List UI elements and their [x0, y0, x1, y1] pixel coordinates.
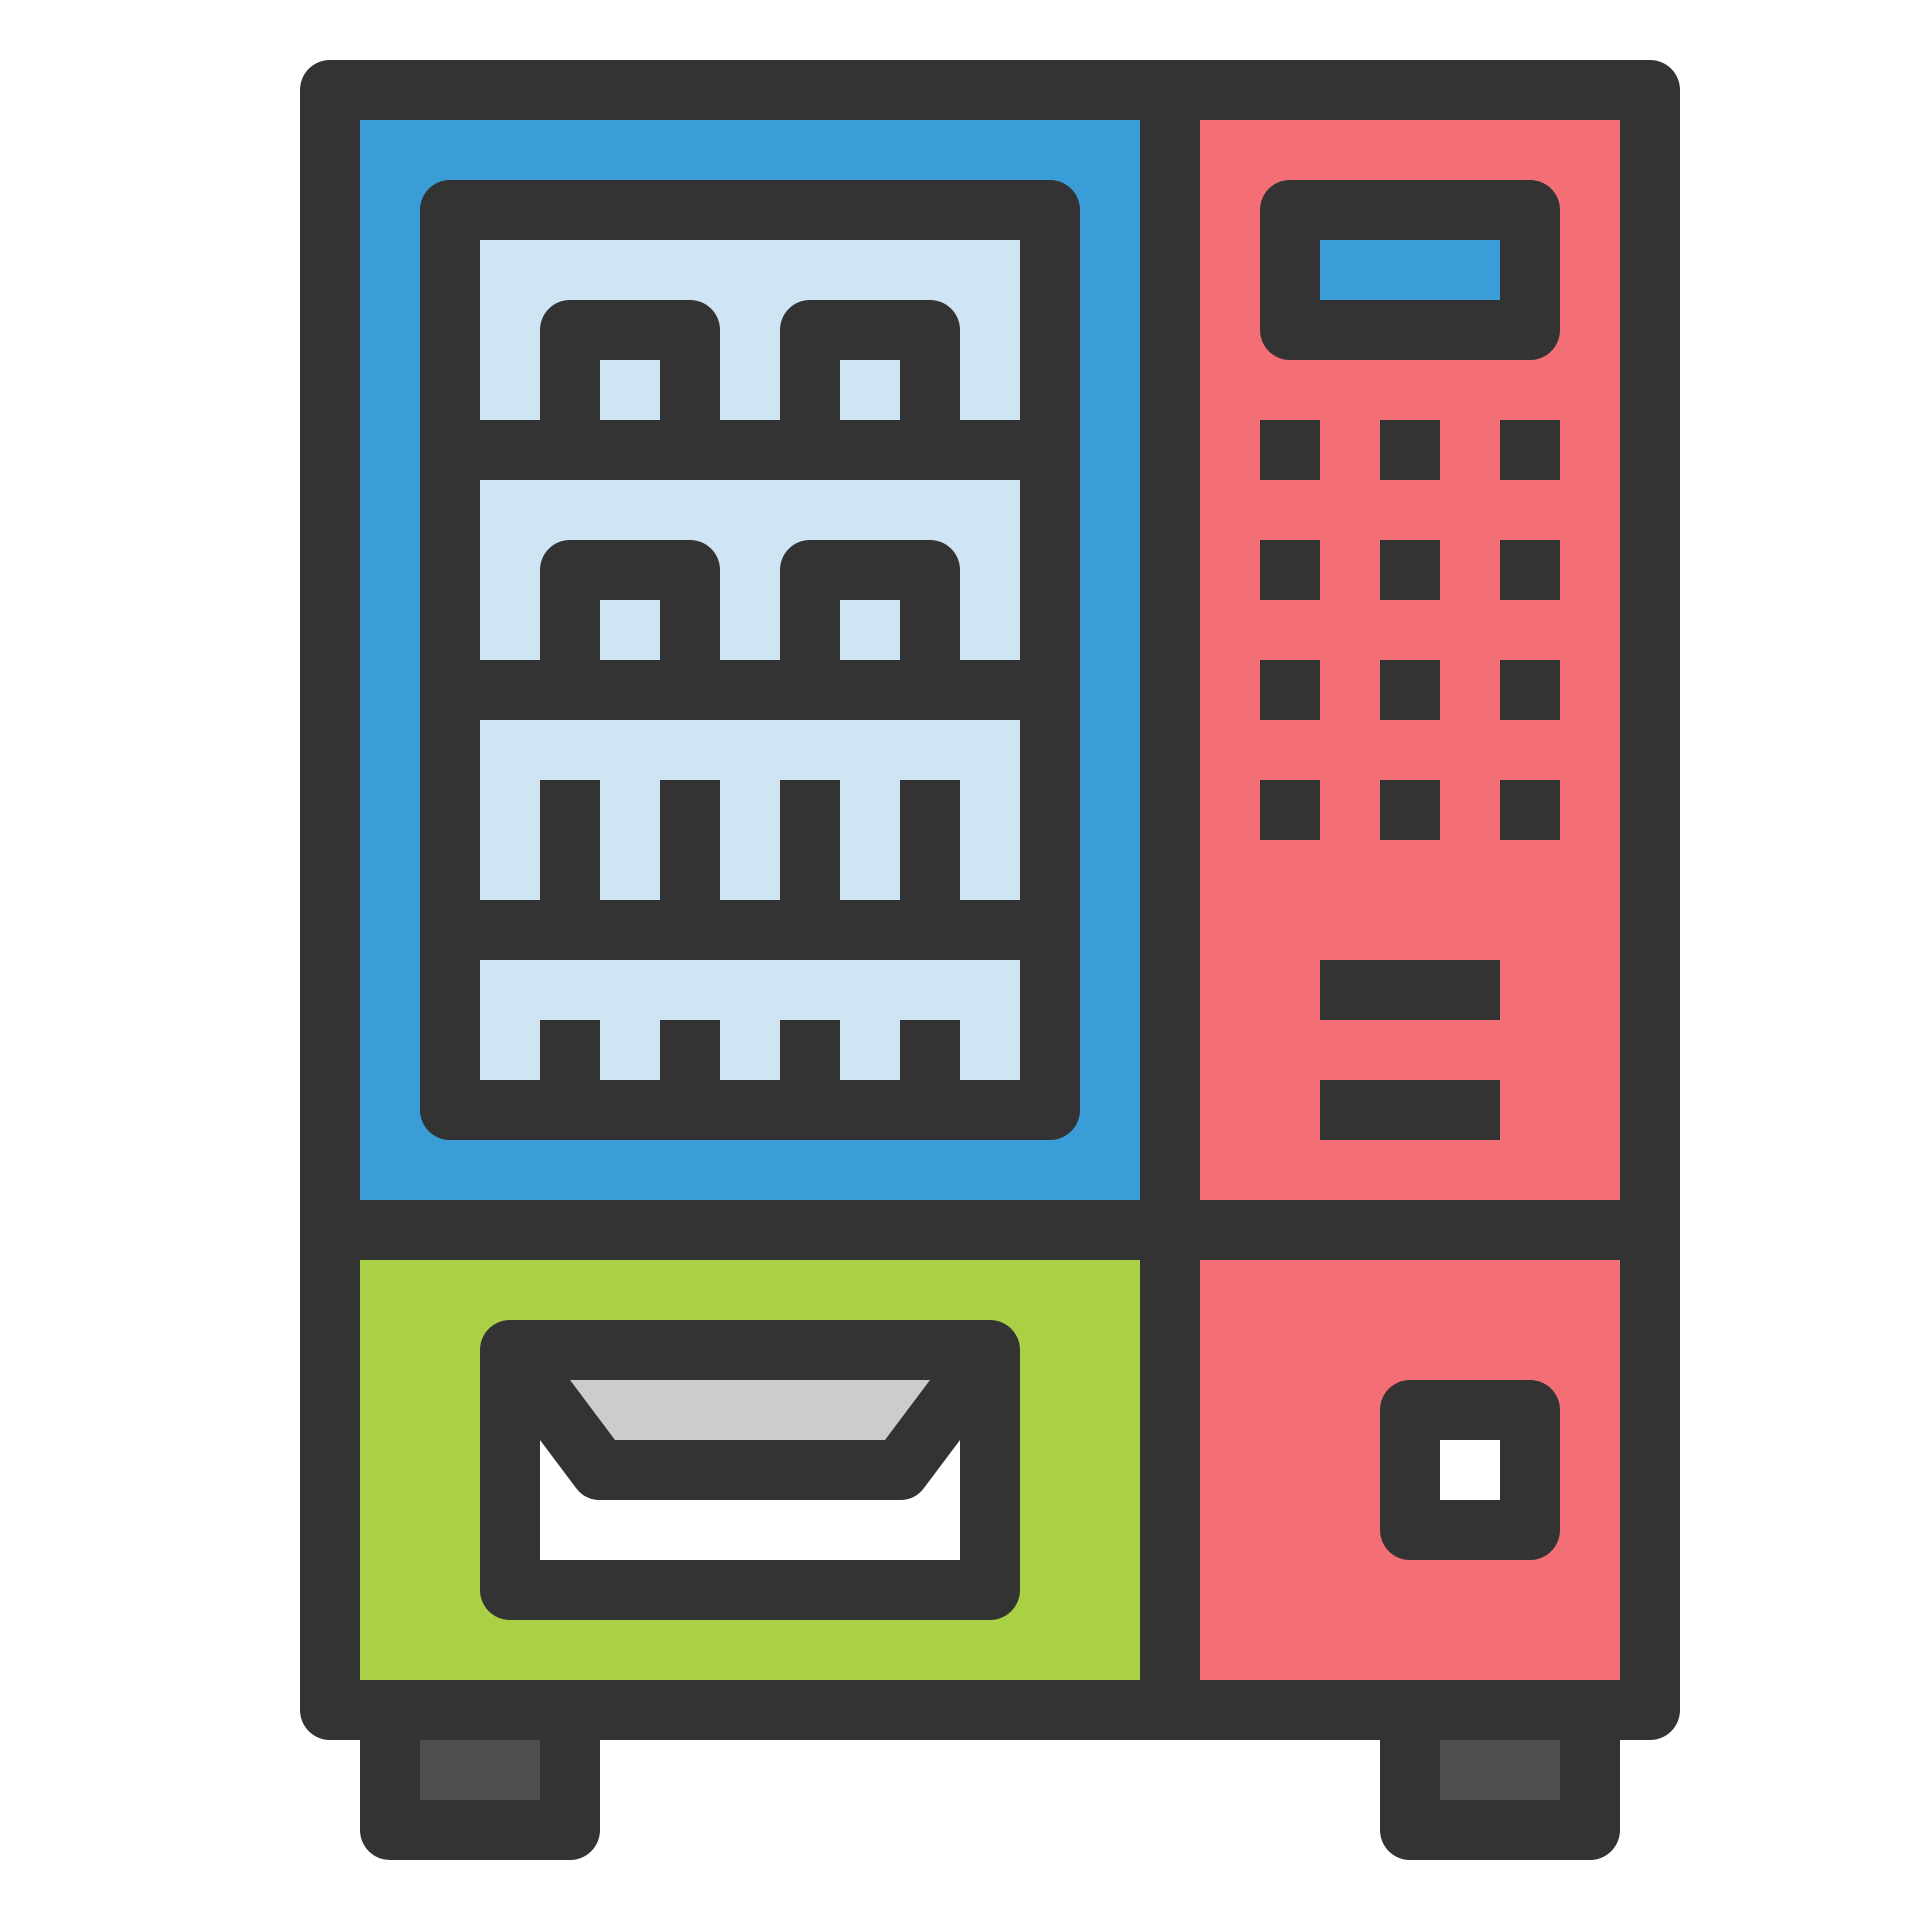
- product window frame: [420, 180, 1080, 1140]
- pickup tray: [480, 1320, 1020, 1620]
- keypad: [1260, 420, 1560, 840]
- tray flap: [570, 1380, 930, 1440]
- panel: coin return section: [1200, 1260, 1620, 1680]
- screen: [1260, 180, 1560, 360]
- payment slots: [1320, 960, 1500, 1140]
- panel: pickup section: [360, 1260, 1140, 1680]
- tray opening: [540, 1440, 960, 1560]
- left leg: [360, 1680, 600, 1860]
- shelf row 1 with products: [480, 240, 1020, 420]
- right leg: [1380, 1680, 1620, 1860]
- shelf row 2 with products: [480, 480, 1020, 660]
- machine body: [300, 60, 1680, 1740]
- shelf row 4 with dividers: [480, 960, 1020, 1080]
- panel: glass display front: [360, 120, 1140, 1200]
- coin return: [1380, 1380, 1560, 1560]
- panel: control side: [1200, 120, 1620, 1200]
- shelf row 3 with dividers: [480, 720, 1020, 900]
